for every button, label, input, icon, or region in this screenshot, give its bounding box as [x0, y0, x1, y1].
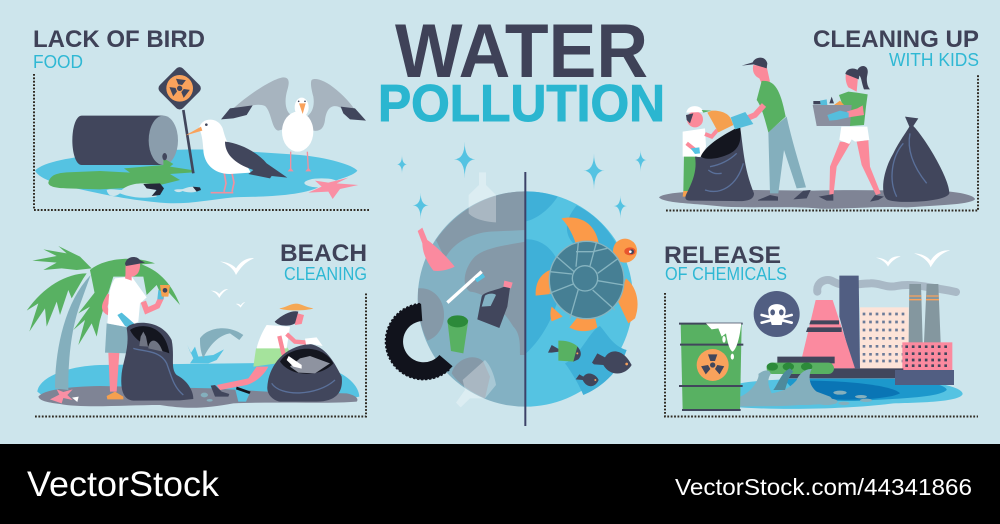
- illustration: people cleaning a beach: [27, 246, 359, 408]
- bag held open: [685, 126, 754, 201]
- footer logo: VectorStock: [27, 465, 220, 504]
- panel: lack of bird food: [33, 26, 370, 210]
- man: [105, 257, 170, 399]
- skull badge: [754, 291, 800, 337]
- gull standing at back with raised wings: [221, 77, 366, 171]
- heading: beach cleaning: BEACH: [280, 240, 367, 267]
- water: [740, 379, 963, 409]
- panel: release of chemicals: [664, 242, 978, 416]
- fish: [548, 341, 632, 386]
- sparkles: [397, 142, 647, 219]
- tyre: [386, 304, 450, 379]
- panel: beach cleaning: [27, 240, 367, 416]
- heading: release of chemicals: OF CHEMICALS: [665, 264, 787, 284]
- green spill: [48, 160, 193, 189]
- full rubbish bag: [883, 117, 949, 202]
- heading: beach cleaning: CLEANING: [284, 264, 367, 284]
- detergent bottle: [707, 111, 733, 132]
- detergent jug: [477, 281, 513, 328]
- chemical barrel: [679, 323, 743, 410]
- starfish: [304, 178, 358, 199]
- palm tree: [27, 246, 180, 390]
- polluted half of the globe: [418, 191, 525, 407]
- gull in front: [185, 120, 287, 193]
- woman with box: [813, 66, 884, 202]
- large open bag: [121, 323, 193, 401]
- seagull silhouettes: [876, 250, 950, 267]
- woman crouching: [211, 304, 313, 397]
- turtle: [536, 217, 638, 331]
- water pool: [35, 150, 357, 203]
- title: POLLUTION: [378, 75, 665, 133]
- discharge pipes: [767, 363, 834, 374]
- starfish and litter: [50, 389, 79, 403]
- dolphin and splash: [187, 328, 243, 363]
- heading: beach cleaning: [280, 240, 367, 284]
- heading: cleaning up with kids: [813, 26, 979, 70]
- barrel: [72, 116, 178, 165]
- second open bag with glove hands: [267, 337, 342, 402]
- title: [378, 9, 665, 133]
- sea: [37, 363, 359, 402]
- smoke: [817, 280, 956, 292]
- heading: lack of bird food: LACK OF BIRD: [33, 26, 205, 53]
- heading: lack of bird food: [33, 26, 205, 72]
- illustration: family collecting rubbish: [659, 58, 975, 209]
- heading: cleaning up with kids: WITH KIDS: [889, 50, 979, 70]
- footer image id: VectorStock.com/44341866: [675, 474, 972, 500]
- dead fish: [107, 183, 201, 198]
- heading: release of chemicals: [664, 242, 787, 284]
- kid: [683, 106, 717, 197]
- pink bottle: [418, 228, 455, 271]
- heading: release of chemicals: RELEASE: [664, 242, 781, 269]
- polluted outflow: [740, 368, 872, 407]
- seagull silhouettes: [211, 258, 254, 308]
- illustration: factory and chemical barrel: [679, 250, 963, 410]
- panel: cleaning up with kids: [659, 26, 979, 210]
- heading: lack of bird food: FOOD: [33, 52, 83, 72]
- divider line: [522, 172, 528, 426]
- title: WATER: [395, 9, 648, 94]
- clean half of the globe: [525, 191, 633, 407]
- warning sign: [157, 65, 203, 173]
- ground: [659, 190, 975, 209]
- factory: [777, 276, 954, 385]
- toothbrush: [447, 272, 484, 303]
- pebbles: [201, 393, 213, 402]
- bucket: [235, 388, 250, 402]
- man: [731, 58, 811, 201]
- translucent plastic bottles: [456, 172, 496, 407]
- illustration: oil spill, barrel, sign and gulls: [35, 65, 366, 203]
- footer band: [0, 444, 1000, 524]
- green cup: [447, 315, 468, 353]
- sand: [38, 386, 357, 408]
- central globe: polluted half and clean half: [386, 142, 647, 426]
- heading: cleaning up with kids: CLEANING UP: [813, 26, 979, 53]
